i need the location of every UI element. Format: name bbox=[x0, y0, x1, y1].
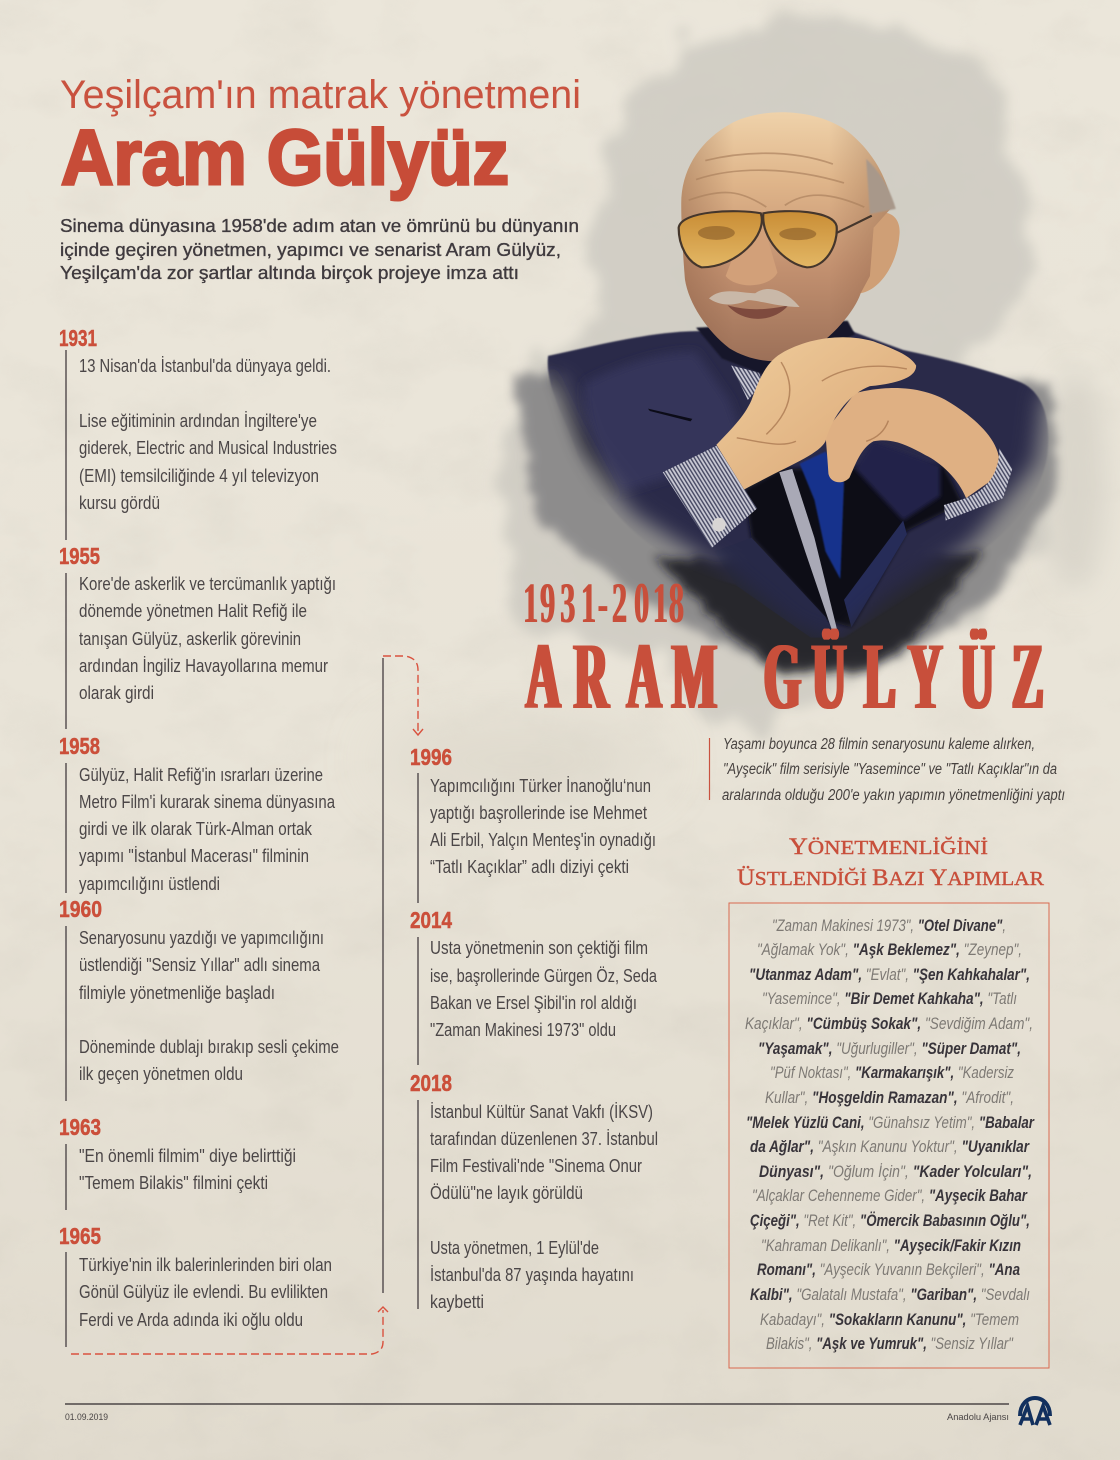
intro paragraph bbox=[60, 215, 579, 283]
timeline entry 1960: üstlendiği "Sensiz Yıllar" adlı sinema bbox=[79, 954, 321, 975]
timeline entry 1931: Lise eğitiminin ardından İngiltere'ye bbox=[79, 410, 317, 431]
timeline entry 2014: ise, başrollerinde Gürgen Öz, Seda bbox=[430, 965, 658, 986]
timeline entry 1955: 1955 bbox=[59, 543, 100, 569]
grey watercolor wash behind portrait bbox=[380, 24, 1107, 800]
title line 2: Aram Gülyüz bbox=[61, 113, 509, 201]
big name: ARAM GÜLYÜZ bbox=[526, 625, 1044, 730]
filmography box bbox=[729, 903, 1049, 1368]
timeline entry 2014 bbox=[410, 907, 658, 1065]
film list: Bilakis", "Aşk ve Yumruk", "Sensiz Yıllar" bbox=[766, 1334, 1014, 1353]
timeline entry 1958 bbox=[59, 733, 336, 894]
timeline entry 1960: filmiyle yönetmenliğe başladı bbox=[79, 982, 275, 1003]
timeline entry 2014: 2014 bbox=[410, 907, 452, 933]
timeline entry 1996: 1996 bbox=[410, 744, 452, 770]
timeline entry 1955: Kore'de askerlik ve tercümanlık yaptığı bbox=[79, 573, 336, 594]
timeline entry 1996: Ali Erbil, Yalçın Menteş'in oynadığı bbox=[430, 829, 656, 850]
intro paragraph: Yeşilçam'da zor şartlar altında birçok projeye imza attı bbox=[60, 262, 519, 283]
timeline entry 1960: Senaryosunu yazdığı ve yapımcılığını bbox=[79, 927, 324, 948]
timeline entry 1958: Gülyüz, Halit Refiğ'in ısrarları üzerine bbox=[79, 764, 323, 785]
timeline entry 1996: yaptığı başrollerinde ise Mehmet bbox=[430, 802, 647, 823]
timeline entry 1931: 1931 bbox=[59, 325, 97, 351]
timeline entry 2018 bbox=[410, 1070, 658, 1312]
film list: Çiçeği", "Ret Kit", "Ömercik Babasının Oğlu", bbox=[750, 1211, 1030, 1230]
portrait illustration bbox=[515, 112, 1059, 672]
finger lines bbox=[737, 362, 907, 444]
timeline entry 2014: "Zaman Makinesi 1973" oldu bbox=[430, 1019, 616, 1040]
timeline entry 1965: Gönül Gülyüz ile evlendi. Bu evlilikten bbox=[79, 1281, 328, 1302]
timeline entry 2014: Bakan ve Ersel Şibil'in rol aldığı bbox=[430, 992, 637, 1013]
timeline entry 1965: 1965 bbox=[59, 1223, 101, 1249]
jacket lights and shadows bbox=[585, 352, 744, 493]
tie bbox=[800, 452, 844, 579]
timeline entry 1955: dönemde yönetmen Halit Refiğ ile bbox=[79, 600, 307, 621]
intro paragraph: Sinema dünyasına 1958'de adım atan ve ömrünü bu dünyanın bbox=[60, 215, 579, 236]
timeline entry 1963: "En önemli filmim" diye belirttiği bbox=[79, 1145, 296, 1166]
right cuff bbox=[944, 448, 1012, 520]
timeline entry 1955: ardından İngiliz Havayollarına memur bbox=[79, 655, 328, 676]
timeline entry 1960: ilk geçen yönetmen oldu bbox=[79, 1063, 243, 1084]
timeline entry 1931: kursu gördü bbox=[79, 492, 160, 513]
film list: Romanı", "Ayşecik Yuvanın Bekçileri", "Ana bbox=[757, 1260, 1020, 1279]
timeline entry 1960: 1960 bbox=[59, 896, 102, 922]
shirt collar bbox=[731, 366, 763, 400]
timeline entry 1931 bbox=[59, 325, 337, 540]
column divider line bbox=[382, 658, 384, 1293]
timeline entry 1996 bbox=[410, 744, 656, 903]
film list: Kalbi", "Galatalı Mustafa", "Gariban", "Sevdalı bbox=[750, 1285, 1030, 1304]
back hand bbox=[826, 388, 1003, 498]
timeline entry 1996: Yapımcılığını Türker İnanoğlu‘nun bbox=[430, 775, 651, 796]
film list: "Utanmaz Adam", "Evlat", "Şen Kahkahalar", bbox=[749, 965, 1030, 984]
life dates: 1931-2018 bbox=[523, 571, 684, 635]
quote rule bbox=[708, 738, 710, 800]
quote text: aralarında olduğu 200'e yakın yapımın yönetmenliğini yaptı bbox=[722, 787, 1065, 804]
box frame bbox=[729, 903, 1049, 1368]
timeline entry 2018: kaybetti bbox=[430, 1291, 484, 1312]
quote text bbox=[722, 736, 1065, 804]
timeline entry 2018: Ödülü"ne layık görüldü bbox=[430, 1182, 583, 1203]
timeline entry 1996: “Tatlı Kaçıklar” adlı diziyi çekti bbox=[430, 856, 629, 877]
timeline entry 1958: yapımcılığını üstlendi bbox=[79, 873, 220, 894]
timeline entry 1965: Türkiye'nin ilk balerinlerinden biri olan bbox=[79, 1254, 332, 1275]
film list: Kabadayı", "Sokakların Kanunu", "Temem bbox=[760, 1310, 1019, 1329]
title bbox=[60, 73, 581, 201]
timeline entry 2018: tarafından düzenlenen 37. İstanbul bbox=[430, 1128, 658, 1149]
front hand bbox=[716, 337, 916, 490]
timeline entry 1958: girdi ve ilk olarak Türk-Alman ortak bbox=[79, 818, 313, 839]
timeline entry 1931: 13 Nisan'da İstanbul'da dünyaya geldi. bbox=[79, 355, 331, 376]
timeline entry 2018: İstanbul'da 87 yaşında hayatını bbox=[430, 1264, 634, 1285]
film list: Kullar", "Hoşgeldin Ramazan", "Afrodit", bbox=[765, 1088, 1014, 1107]
timeline entry 1955: olarak girdi bbox=[79, 682, 154, 703]
intro paragraph: içinde geçiren yönetmen, yapımcı ve senarist Aram Gülyüz, bbox=[60, 239, 561, 260]
forehead wrinkles bbox=[689, 153, 864, 207]
timeline entry 2018: Usta yönetmen, 1 Eylül'de bbox=[430, 1237, 599, 1258]
cuff button bbox=[712, 518, 726, 532]
film list: da Ağlar", "Aşkın Kanunu Yoktur", "Uyanıklar bbox=[750, 1137, 1030, 1156]
film list: "Püf Noktası", "Karmakarışık", "Kadersiz bbox=[770, 1063, 1014, 1082]
timeline entry 1963: "Temem Bilakis" filmini çekti bbox=[79, 1172, 268, 1193]
quote text: Yaşamı boyunca 28 filmin senaryosunu kaleme alırken, bbox=[723, 736, 1035, 753]
date: 01.09.2019 bbox=[65, 1412, 108, 1423]
timeline entry 1963 bbox=[59, 1114, 296, 1210]
eyes bbox=[698, 226, 816, 240]
filmography heading: ÜSTLENDİĞİ BAZI YAPIMLAR bbox=[737, 865, 1044, 891]
timeline entry 1963: 1963 bbox=[59, 1114, 101, 1140]
film list: Dünyası", "Oğlum İçin", "Kader Yolcuları", bbox=[759, 1162, 1032, 1181]
title line 1: Yeşilçam'ın matrak yönetmeni bbox=[60, 73, 581, 117]
timeline entry 2014: Usta yönetmenin son çektiği film bbox=[430, 937, 648, 958]
mustache bbox=[709, 289, 800, 307]
left cuff bbox=[663, 446, 757, 548]
film list: "Zaman Makinesi 1973", "Otel Divane", bbox=[772, 916, 1006, 935]
jacket bbox=[548, 331, 1048, 638]
timeline entry 1960 bbox=[59, 896, 339, 1101]
timeline entry 1955: tanışan Gülyüz, askerlik görevinin bbox=[79, 628, 301, 649]
film list: "Kahraman Delikanlı", "Ayşecik/Fakir Kızın bbox=[761, 1236, 1021, 1255]
mouth bbox=[727, 305, 789, 319]
film list bbox=[745, 916, 1035, 1353]
filmography heading: YÖNETMENLİĞİNİ bbox=[789, 834, 988, 860]
timeline entry 1958: 1958 bbox=[59, 733, 100, 759]
filmography heading bbox=[737, 834, 1044, 891]
timeline entry 1965 bbox=[59, 1223, 332, 1347]
agency name: Anadolu Ajansı bbox=[947, 1412, 1009, 1423]
timeline entry 1965: Ferdi ve Arda adında iki oğlu oldu bbox=[79, 1309, 303, 1330]
film list: "Yaşamak", "Uğurlugiller", "Süper Damat", bbox=[758, 1039, 1021, 1058]
side hair bbox=[866, 159, 896, 214]
timeline entry 1931: giderek, Electric and Musical Industries bbox=[79, 437, 337, 458]
timeline entry 1955 bbox=[59, 543, 336, 729]
film list: "Alçaklar Cehenneme Gider", "Ayşecik Bahar bbox=[752, 1186, 1028, 1205]
head bbox=[681, 112, 892, 361]
shirt placket bbox=[779, 469, 837, 631]
film list: "Ağlamak Yok", "Aşk Beklemez", "Zeynep", bbox=[757, 940, 1022, 959]
icon: agency logo bbox=[1020, 1398, 1050, 1425]
film list: "Yasemince", "Bir Demet Kahkaha", "Tatlı bbox=[762, 989, 1017, 1008]
timeline entry 2018: 2018 bbox=[410, 1070, 452, 1096]
film list: Kaçıklar", "Cümbüş Sokak", "Sevdiğim Adam", bbox=[745, 1014, 1033, 1033]
glasses bbox=[679, 211, 872, 267]
timeline entry 2018: Film Festivali'nde "Sinema Onur bbox=[430, 1155, 642, 1176]
timeline entry 1931: (EMI) temsilciliğinde 4 yıl televizyon bbox=[79, 465, 319, 486]
nose bbox=[726, 228, 777, 285]
timeline entry 1958: Metro Film'i kurarak sinema dünyasına bbox=[79, 791, 336, 812]
arrow: dashed connector down to column two bbox=[383, 656, 423, 735]
arrow: dashed connector up from column one bbox=[71, 1307, 388, 1354]
timeline entry 2018: İstanbul Kültür Sanat Vakfı (İKSV) bbox=[430, 1101, 653, 1122]
career summary quote bbox=[710, 736, 1065, 804]
footer bbox=[65, 1398, 1050, 1425]
film list: "Melek Yüzlü Cani, "Günahsız Yetim", "Babalar bbox=[746, 1113, 1035, 1132]
timeline entry 1960: Döneminde dublajı bırakıp sesli çekime bbox=[79, 1036, 339, 1057]
timeline entry 1958: yapımı "İstanbul Macerası" filminin bbox=[79, 845, 309, 866]
dark smoke under jacket bbox=[515, 376, 1059, 672]
ear bbox=[861, 213, 900, 293]
quote text: "Ayşecik" film serisiyle "Yasemince" ve "Tatlı Kaçıklar"ın da bbox=[723, 761, 1057, 778]
neck shadow bbox=[696, 321, 855, 376]
